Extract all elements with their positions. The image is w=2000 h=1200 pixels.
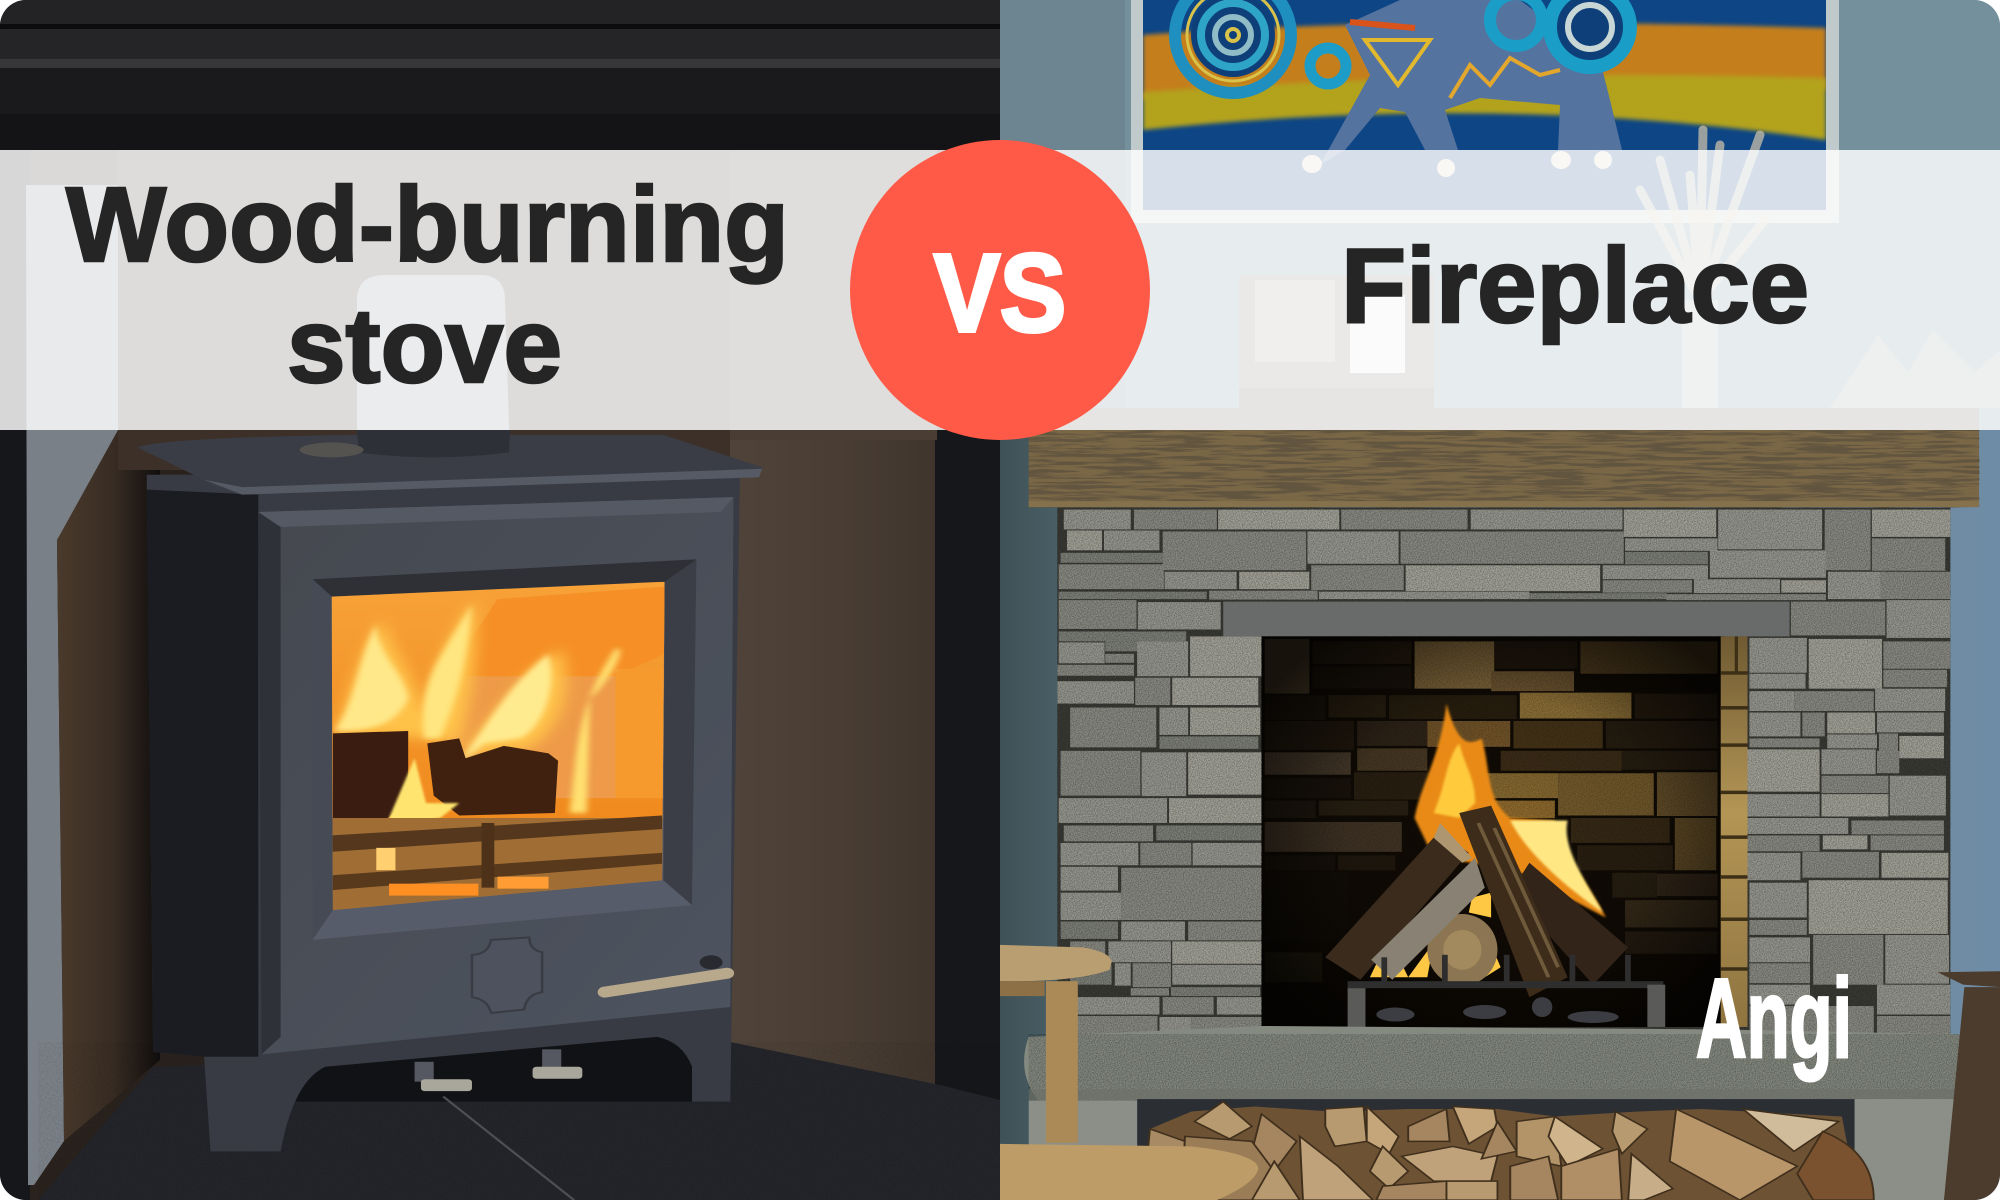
decor on the mantel — [1000, 130, 2000, 430]
reclaimed wood mantel — [1029, 430, 1979, 507]
stacked fire logs — [1325, 806, 1628, 997]
floor tile joint — [443, 1097, 574, 1200]
stove flue collar — [357, 430, 510, 457]
stove stovepipe — [357, 275, 510, 460]
ash door plate — [472, 937, 542, 1013]
blue wall — [1000, 0, 2000, 1200]
panel: fireplace photo — [1000, 0, 2000, 1200]
door handle — [605, 955, 727, 992]
vs badge: VS — [934, 232, 1066, 355]
painting: animal paws — [1302, 151, 1612, 177]
flames — [335, 604, 620, 813]
slate floor — [38, 1042, 1000, 1200]
heading: Fireplace: Fireplace — [1341, 227, 1809, 345]
shadow beneath stove — [281, 1032, 702, 1102]
painting: yellow arc — [1143, 75, 1826, 140]
moulding above the stove — [0, 0, 1000, 150]
heading: Wood-burning stove — [66, 166, 789, 405]
grate and embers — [332, 818, 663, 913]
vs badge — [850, 140, 1150, 440]
soft flame glow — [335, 599, 566, 758]
heading: Wood-burning stove: stove — [287, 287, 562, 405]
fire flames — [1370, 704, 1606, 977]
right dark wood chair — [1938, 971, 2000, 1200]
rear right log — [1510, 863, 1628, 985]
wall behind stove — [0, 150, 1000, 1200]
background mountain decor — [1830, 330, 2000, 408]
stove body and legs — [147, 475, 740, 1151]
air control pedals — [415, 1049, 582, 1091]
stove door panel — [258, 497, 733, 1054]
log grate — [1348, 955, 1665, 1027]
firewood store — [1029, 1099, 1957, 1200]
painting: small swirl — [1310, 48, 1346, 84]
painting: right swirls — [1490, 0, 1630, 67]
stove top plate — [137, 435, 762, 495]
front right log — [1459, 806, 1568, 997]
framed painting — [1131, 0, 1839, 223]
stacked stone surround — [1057, 508, 1950, 1036]
stove glass and fire — [319, 579, 676, 918]
heading: Wood-burning stove: Wood-burning — [66, 166, 789, 284]
pampas grass — [1640, 130, 1765, 300]
painting: left swirl — [1175, 0, 1291, 93]
candle — [1350, 295, 1405, 373]
painting: animal figure — [1320, 0, 1622, 165]
stone hearth — [1024, 1026, 1960, 1101]
panel: wood-burning stove photo — [0, 0, 1000, 1200]
fireplace — [1000, 430, 2000, 1200]
logs in stove — [332, 731, 408, 818]
left log — [1325, 830, 1469, 980]
Angi logo: Angi — [1696, 956, 1852, 1081]
wood-burning stove — [137, 430, 762, 1200]
decorative box — [1239, 275, 1434, 408]
cut log round — [1427, 914, 1497, 986]
painting: orange arc — [1143, 23, 1826, 100]
translucent title band — [0, 150, 2000, 430]
vase — [1682, 300, 1718, 408]
door recessed frame — [313, 559, 696, 940]
steel lintel — [1223, 602, 1790, 636]
pale split log — [1371, 858, 1485, 980]
left side table and stool — [1000, 945, 1258, 1200]
firebox with lit stone — [1261, 636, 1748, 1027]
